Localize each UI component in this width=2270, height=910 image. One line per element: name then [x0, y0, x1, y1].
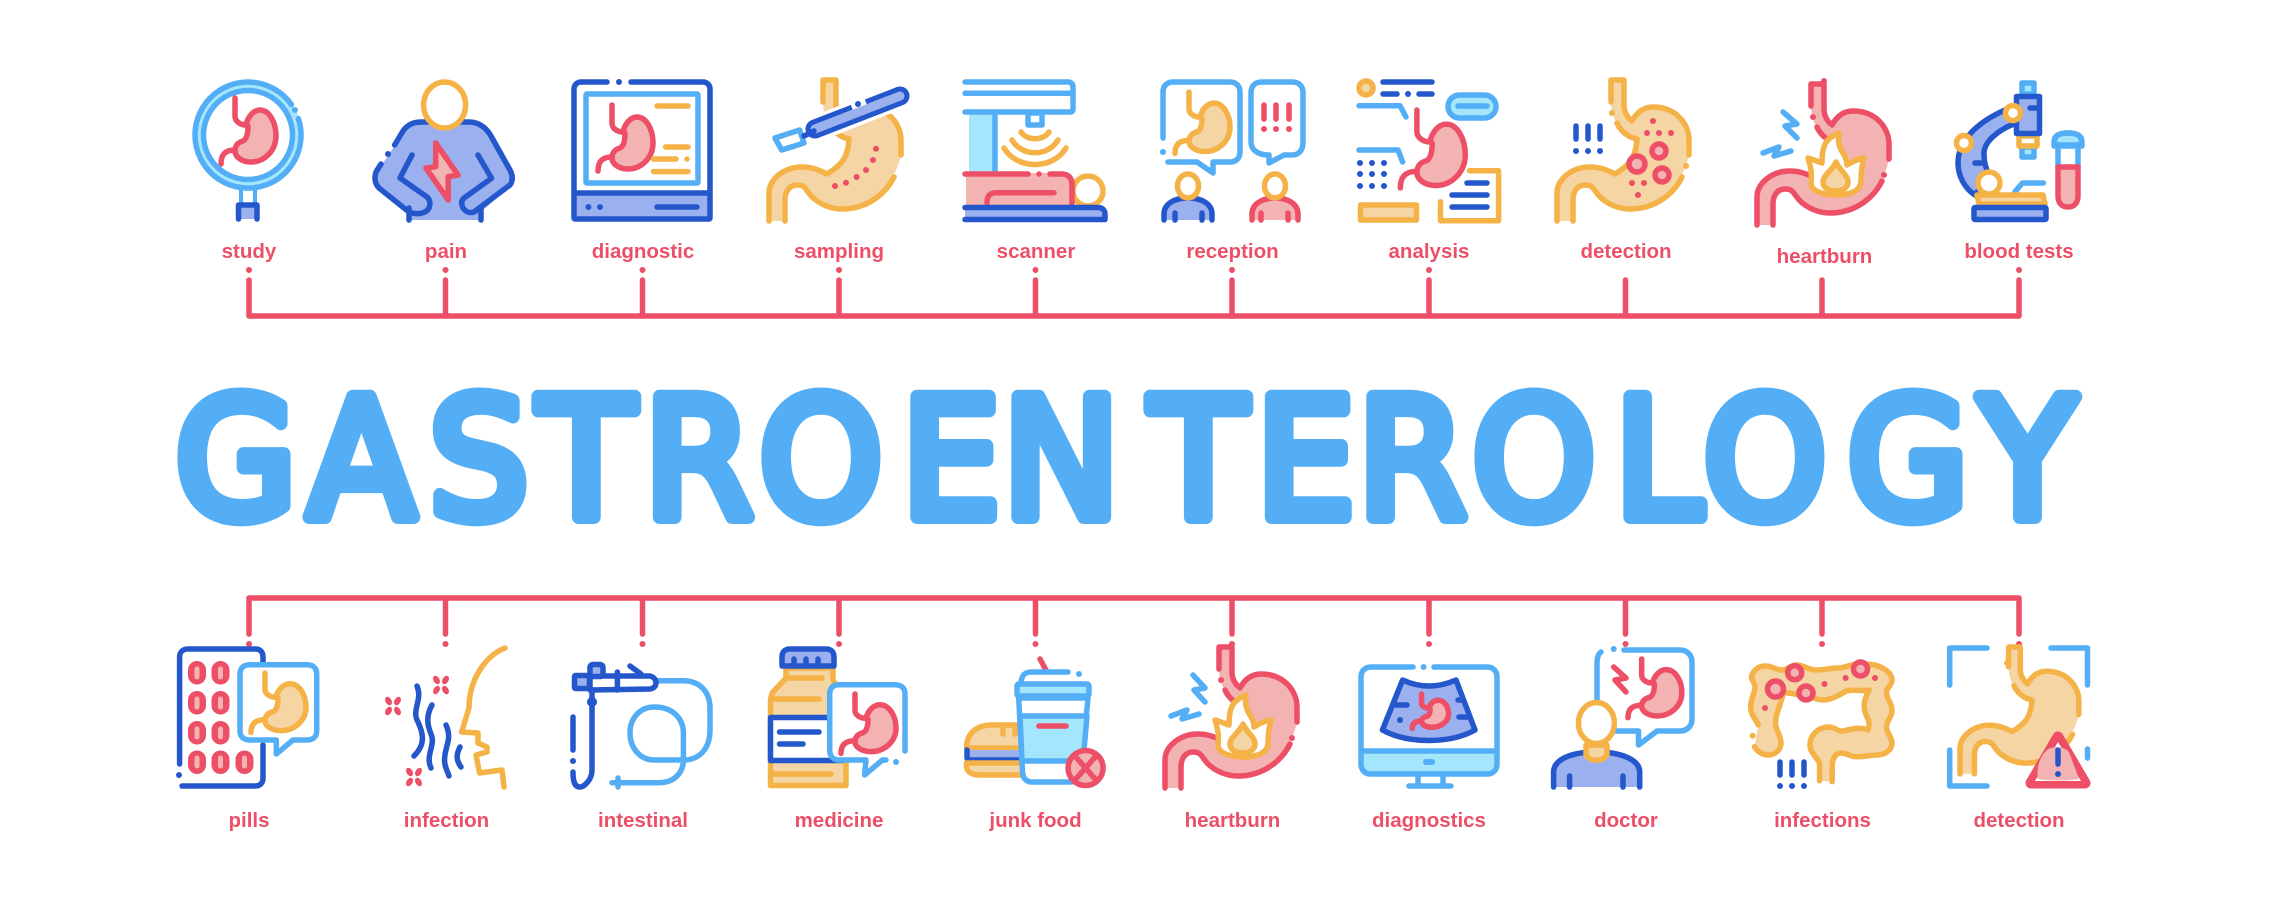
- lens ring fill: [199, 86, 297, 184]
- neck: [1586, 745, 1607, 760]
- monitor: [1361, 667, 1497, 774]
- stomach: [1400, 110, 1465, 188]
- pain bolt: [426, 143, 458, 200]
- scalpel handle: [813, 96, 900, 130]
- label: infections: infections: [1774, 809, 1871, 832]
- stomach: [1165, 647, 1297, 788]
- speech bubble: [1597, 650, 1692, 745]
- stomach: [251, 673, 306, 732]
- face profile: [462, 648, 505, 787]
- icon: intestinal endoscope: [573, 664, 710, 787]
- right speech bubble: [1251, 82, 1303, 163]
- label: analysis: analysis: [1389, 240, 1469, 263]
- stomach: [1412, 694, 1449, 728]
- tube: [2016, 96, 2040, 134]
- box: [1360, 205, 1416, 220]
- stomach: [598, 105, 653, 171]
- spots: [1632, 121, 1671, 195]
- lower screen band: [1361, 751, 1497, 774]
- report: [1440, 171, 1499, 221]
- pills: [188, 661, 254, 774]
- label: detection: detection: [1580, 240, 1672, 263]
- title: GASTROENTEROLOGY: [175, 364, 2076, 556]
- bolts: [1171, 675, 1205, 719]
- icon: sampling scalpel: [769, 80, 901, 221]
- eyepiece: [2022, 83, 2034, 94]
- label: medicine: medicine: [795, 809, 883, 832]
- colon fill: [1751, 664, 1892, 782]
- scan brackets: [1950, 648, 2088, 786]
- cap: [782, 649, 834, 666]
- ultrasound fan: [1382, 680, 1475, 740]
- icon: medicine bottle: [770, 649, 905, 786]
- test tube: [2054, 133, 2082, 146]
- scalpel blade: [775, 130, 804, 150]
- exclamation marks: [1264, 105, 1289, 119]
- label: pain: pain: [425, 240, 467, 263]
- shoulders: [1554, 752, 1640, 787]
- objective: [2019, 136, 2037, 146]
- label: infection: infection: [404, 809, 489, 832]
- colon outline: [1751, 664, 1892, 782]
- icon: infections colon: [1751, 662, 1892, 786]
- infection rings: [1788, 666, 1802, 680]
- icon: diagnostics monitor: [1361, 667, 1497, 786]
- label: junk food: junk food: [988, 809, 1082, 832]
- icon: scanner: [965, 82, 1105, 220]
- icon: detection frame: [1950, 647, 2088, 786]
- stomach: [1628, 659, 1682, 718]
- gantry: [965, 82, 1073, 112]
- probe: [1028, 113, 1042, 125]
- screen: [586, 94, 698, 183]
- label: blood tests: blood tests: [1964, 240, 2074, 263]
- stomach: [1757, 84, 1889, 225]
- person right: [1252, 198, 1298, 220]
- slide: [2015, 183, 2043, 192]
- cup label: [1039, 723, 1066, 729]
- top connector: [249, 270, 2019, 316]
- bottom connector: [249, 598, 2019, 644]
- warning marks: [1576, 126, 1600, 139]
- head: [1578, 702, 1614, 744]
- icon: pain: [375, 82, 513, 220]
- arm: [1958, 110, 2014, 195]
- stand: [1409, 776, 1451, 786]
- lid: [1017, 684, 1089, 696]
- stomach in lens: [221, 98, 276, 164]
- icon: junk food: [966, 659, 1103, 786]
- stomach: [1960, 647, 2079, 774]
- warning triangle: [2031, 737, 2085, 783]
- person left: [1164, 198, 1212, 220]
- icon: diagnostic monitor: [574, 82, 710, 219]
- icon: pills: [179, 649, 317, 786]
- label: scanner: scanner: [997, 240, 1075, 263]
- base: [1974, 208, 2046, 220]
- icon: reception: [1163, 82, 1303, 220]
- magnifier handle: [238, 205, 257, 219]
- scope shaft: [573, 690, 592, 787]
- label: study: study: [222, 240, 277, 263]
- text lines: [1383, 82, 1432, 94]
- base: [574, 193, 710, 219]
- icon: heartburn: [1757, 81, 1889, 225]
- label: heartburn: heartburn: [1185, 809, 1280, 832]
- stomach: [1175, 92, 1230, 153]
- torso: [376, 122, 513, 220]
- infection dots: [1765, 678, 1875, 708]
- head: [424, 82, 466, 128]
- stage: [1977, 195, 2045, 204]
- dot grid: [1360, 163, 1384, 186]
- marker: [1359, 81, 1373, 95]
- flame: [1808, 133, 1864, 195]
- germs: [384, 675, 450, 787]
- endoscope handle: [590, 676, 656, 690]
- lens outlines: [195, 82, 301, 204]
- lens: [2022, 147, 2034, 157]
- icon: doctor: [1554, 649, 1692, 787]
- label: heartburn: heartburn: [1777, 245, 1872, 268]
- bottle: [770, 668, 846, 786]
- icon: study magnifier: [195, 82, 301, 219]
- stomach: [1557, 80, 1689, 221]
- label: pills: pills: [228, 809, 270, 832]
- warning marks: [1780, 762, 1804, 775]
- label: [770, 718, 842, 760]
- label: intestinal: intestinal: [598, 809, 688, 832]
- bolt: [1614, 667, 1626, 692]
- label: detection: detection: [1973, 809, 2065, 832]
- flame: [1215, 695, 1271, 757]
- capsule: [1448, 95, 1496, 118]
- text lines: [654, 106, 688, 172]
- breath waves: [414, 686, 461, 776]
- bolts: [1763, 112, 1797, 156]
- label: diagnostic: diagnostic: [592, 240, 694, 263]
- label: reception: reception: [1186, 240, 1279, 263]
- exclamation: [2055, 750, 2061, 764]
- label: diagnostics: diagnostics: [1372, 809, 1486, 832]
- patient head: [1073, 176, 1103, 206]
- icon: analysis: [1359, 81, 1499, 221]
- speech bubble: [830, 685, 905, 775]
- label: doctor: doctor: [1594, 809, 1658, 832]
- icon: infection: [384, 648, 505, 787]
- tube: [612, 681, 710, 787]
- monitor frame: [574, 82, 710, 193]
- icon: microscope: [1956, 83, 2082, 220]
- stomach: [841, 694, 896, 753]
- column: [969, 114, 994, 173]
- burger: [966, 725, 1022, 748]
- scanner table: [965, 208, 1105, 220]
- icon: heartburn bottom: [1165, 647, 1297, 788]
- signal waves: [1004, 132, 1066, 164]
- speech bubble: [240, 665, 317, 754]
- icon: detection stomach: [1557, 80, 1689, 221]
- biopsy dots: [835, 149, 876, 186]
- blister pack: [180, 649, 263, 786]
- cup: [1019, 698, 1088, 782]
- left speech bubble: [1163, 82, 1240, 173]
- bed and blanket: [966, 173, 1070, 206]
- label: sampling: sampling: [794, 240, 884, 263]
- joints: [2006, 106, 2020, 120]
- stomach: [769, 80, 901, 221]
- straw: [1040, 659, 1047, 672]
- no sign: [1068, 750, 1103, 786]
